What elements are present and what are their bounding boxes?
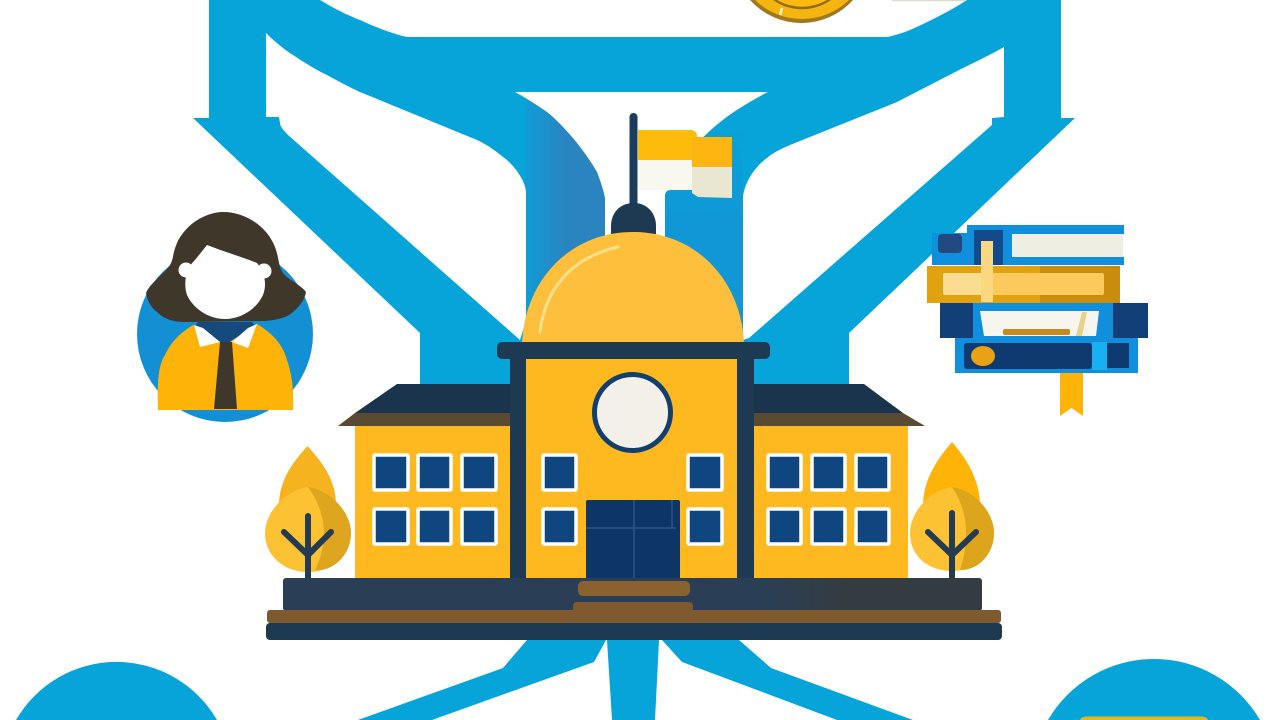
left wing wall: [355, 426, 511, 579]
icon: stack of books: [927, 225, 1148, 416]
book 3 pages: [980, 311, 1099, 336]
right wing windows: [768, 455, 889, 544]
left tree front foliage: [265, 487, 351, 572]
book 3 pale slash: [1076, 312, 1087, 336]
icon: gold coin: [750, 0, 853, 23]
door leaf: [586, 500, 680, 580]
left tree back foliage: [279, 446, 336, 505]
book 1: [932, 225, 1124, 265]
bottom left circle node: [16, 662, 217, 720]
lower connectors: [358, 640, 913, 720]
dome highlight: [540, 247, 618, 332]
left roof: [355, 384, 511, 413]
book 4 cover: [955, 338, 1138, 373]
school building: [266, 342, 1002, 640]
bookmark: [1060, 373, 1083, 416]
flag left yellow: [638, 130, 697, 160]
book 3: [940, 303, 1148, 340]
person blue disc: [137, 246, 313, 422]
book 4 navy panel: [964, 343, 1092, 369]
gold item inside circle: [1080, 716, 1208, 720]
centre lower ray: [607, 640, 659, 720]
book 3 cover: [940, 303, 1148, 338]
flag right beige: [692, 167, 732, 198]
book 3 blue panel: [973, 303, 1113, 340]
left wing windows: [374, 455, 496, 544]
coin inner ring: [773, 0, 831, 9]
top white cutout: [320, 0, 967, 37]
jacket: [158, 324, 293, 410]
right tree trunk: [928, 513, 976, 578]
left column: [510, 355, 526, 579]
left inner blue column: [526, 92, 606, 342]
coin face: [777, 0, 827, 7]
bottom right circle node: [1048, 659, 1260, 720]
book 2 pages: [943, 273, 1104, 295]
left white cutout: [266, 33, 526, 340]
book 4 light ribbon: [1092, 342, 1107, 370]
flag left white: [638, 160, 692, 190]
book 4 gold seal: [971, 346, 995, 366]
book 1 bottom cover: [1000, 257, 1124, 265]
icon: flag: [611, 113, 732, 234]
platform: [266, 578, 1002, 640]
dark base: [266, 623, 1002, 640]
right collar: [232, 324, 257, 348]
book 1 pages: [1012, 234, 1123, 257]
cornice: [497, 342, 770, 359]
left lower ray: [358, 640, 606, 720]
right ear: [256, 264, 272, 278]
face: [185, 245, 265, 319]
blue connector network: [193, 0, 1075, 400]
left collar: [194, 325, 220, 347]
top right page edge: [892, 0, 965, 1]
right eave: [753, 413, 925, 426]
right tree front foliage: [910, 487, 994, 571]
icon: person: [137, 212, 313, 422]
book 1 top cover: [967, 225, 1124, 234]
icon: right tree: [910, 442, 994, 578]
hair: [146, 212, 306, 322]
right white cutout: [743, 47, 1004, 340]
book 4 navy square: [1107, 343, 1129, 368]
tie: [214, 342, 237, 409]
lower step: [573, 602, 693, 612]
left tree shade: [308, 487, 351, 570]
central block: [526, 359, 737, 579]
book 2 cover: [927, 266, 1120, 303]
plinth: [283, 578, 982, 611]
left tree trunk: [284, 516, 331, 578]
right lower ray: [662, 640, 913, 720]
dome: [522, 232, 744, 343]
left ear: [178, 262, 194, 278]
circle: [1048, 659, 1260, 720]
right roof: [753, 384, 903, 413]
right tree shade: [952, 487, 994, 570]
right tree back foliage: [923, 442, 980, 505]
flag pole: [630, 113, 638, 208]
coin band: [755, 0, 849, 19]
left eave: [338, 413, 511, 426]
shirt: [192, 322, 258, 350]
central windows: [543, 455, 722, 544]
right column: [737, 355, 754, 579]
book 2: [927, 266, 1120, 303]
book 1 label: [938, 234, 962, 253]
right inner blue column: [665, 100, 743, 342]
book 1 spine: [932, 233, 1012, 265]
pale ribbon: [981, 241, 993, 302]
book 2 shaded end: [1040, 266, 1120, 303]
upper step: [578, 581, 690, 596]
icon: left tree: [265, 446, 351, 578]
pole finial: [611, 203, 656, 234]
coin highlight: [780, 8, 782, 15]
round window: [594, 374, 670, 450]
book 2 pale pages: [943, 273, 993, 295]
door: [586, 500, 680, 580]
book 1 dark band: [974, 230, 1003, 265]
brown slab: [267, 610, 1001, 623]
book 4: [955, 338, 1138, 373]
coin rim: [750, 0, 853, 23]
book 3 orange line: [1003, 329, 1070, 335]
door lines: [586, 500, 676, 580]
dome body: [522, 232, 744, 343]
right wing wall: [753, 426, 908, 579]
flag right yellow: [692, 137, 732, 167]
connector frame: [193, 0, 1075, 400]
central white funnel: [515, 92, 768, 240]
